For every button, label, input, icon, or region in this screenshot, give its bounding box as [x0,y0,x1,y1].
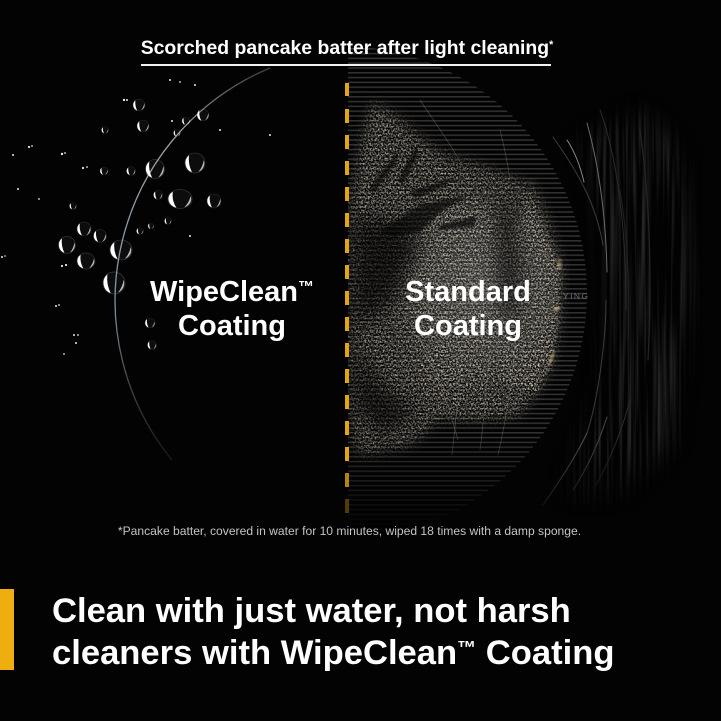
divider: dashed amber line [345,83,349,513]
water droplets [58,99,221,350]
small water specks [1,79,271,355]
brush streaks outside the standard coating disc [542,110,696,506]
label: WipeClean coating [150,276,314,342]
scan line overlay [348,103,567,459]
faint product wording on disc edge: YING [563,291,589,301]
label: standard coating: Coating [414,310,522,342]
horizontal scan lines [348,40,588,550]
footnote: *Pancake batter, covered in water for 10 minutes, wiped 18 times with a damp sponge. [118,524,581,538]
headline: Clean with just water, not harsh [52,592,571,630]
dark gouges [370,146,476,236]
comparison artwork [1,48,696,513]
headline: cleaners with WipeClean™ Coating [52,634,614,672]
label: standard coating [405,276,531,342]
golden flakes [528,177,562,366]
lens rim of WipeClean side [115,68,270,460]
title: Scorched pancake batter after light cleaning* [141,37,553,59]
scorched batter residue [345,95,570,465]
headline [52,592,614,672]
label: WipeClean coating: Coating [178,310,286,342]
panel: standard coating scorched disc [348,48,587,510]
label: standard coating: Standard [405,276,531,308]
title underline [141,64,551,66]
accent bar [0,589,14,670]
wipe scratches [420,100,515,455]
label: WipeClean coating: WipeClean™ [150,276,314,308]
